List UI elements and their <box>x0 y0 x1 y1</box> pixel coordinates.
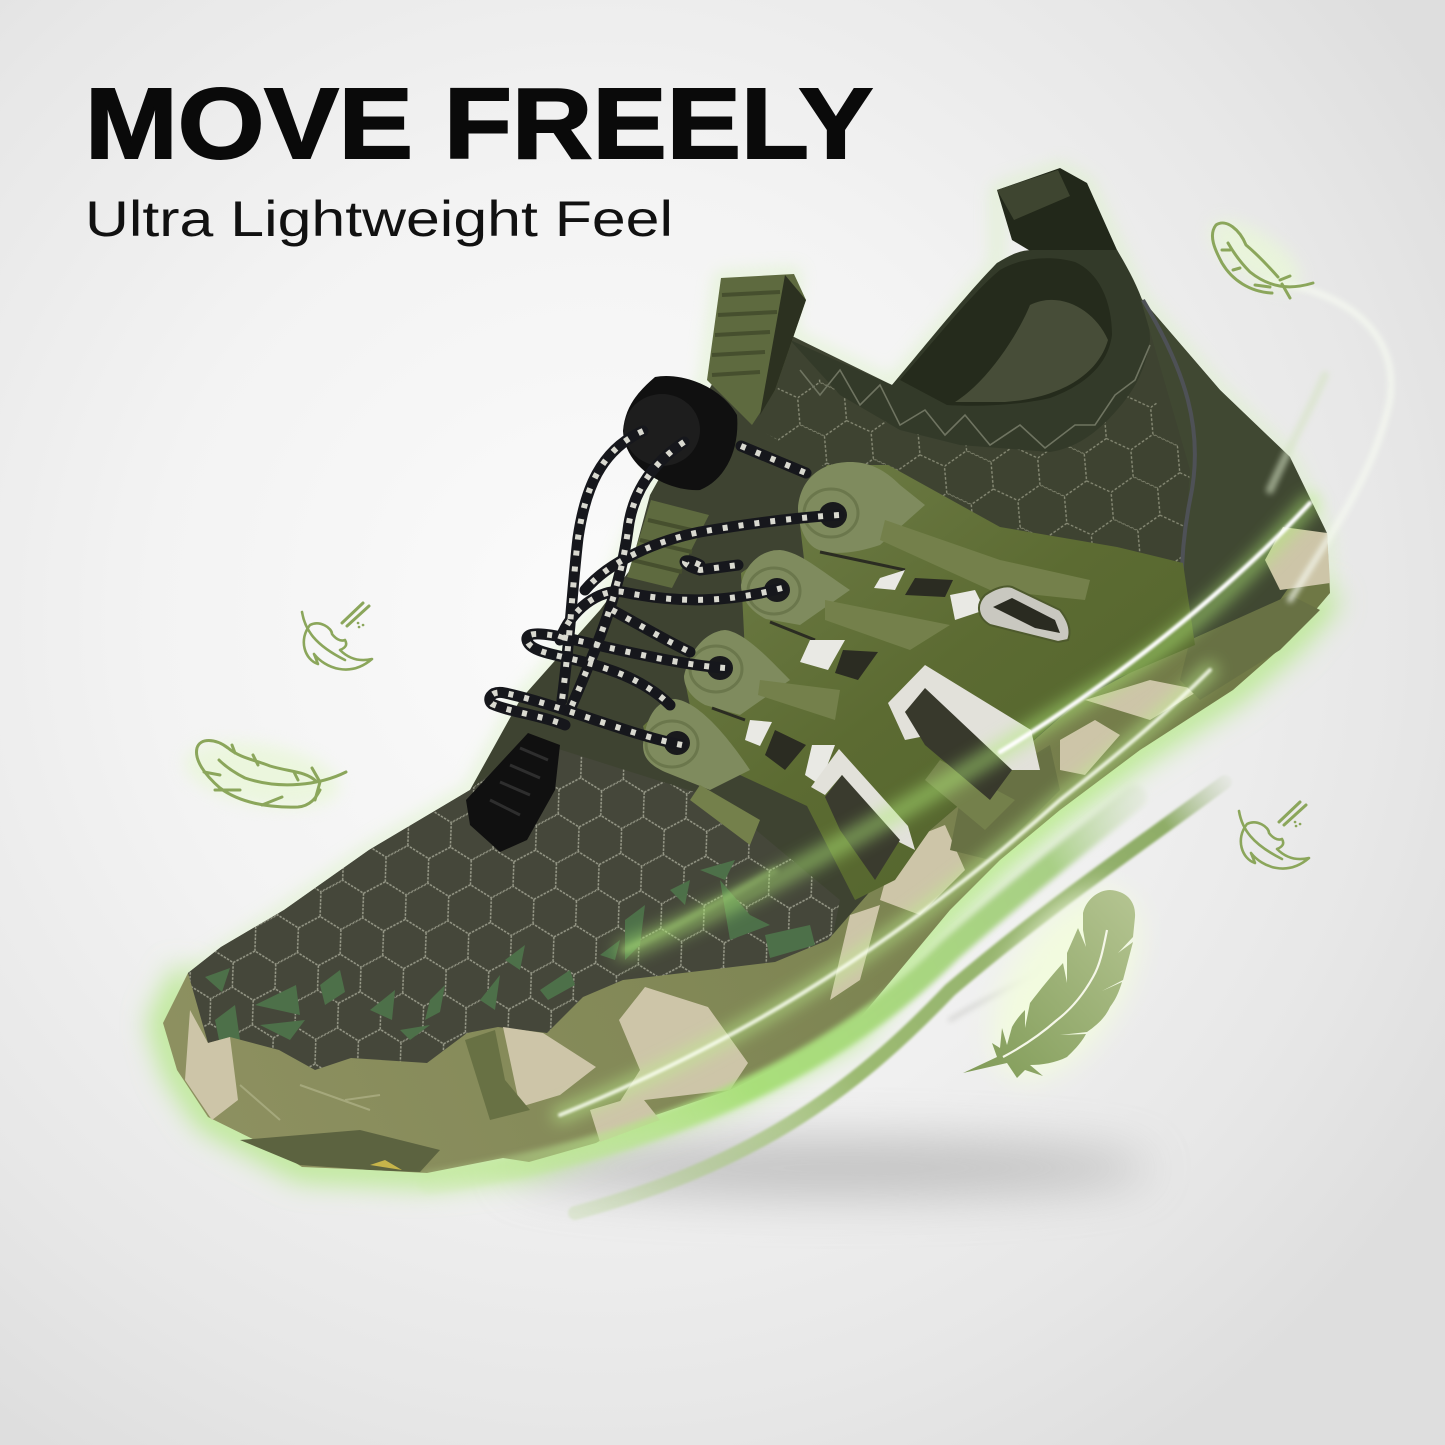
shoe <box>163 168 1330 1173</box>
tongue loop <box>627 274 806 588</box>
green band bright <box>430 797 1135 1182</box>
eyelet heads <box>643 462 925 790</box>
upper mesh <box>188 250 1300 1080</box>
oval window <box>979 586 1070 642</box>
strap gaps <box>712 552 905 720</box>
bright streak glow <box>560 670 1210 1115</box>
upper streak glow <box>625 503 1310 950</box>
upper streak core <box>1000 503 1310 752</box>
toe shards <box>205 860 815 1045</box>
large window <box>888 665 1040 800</box>
collar <box>790 250 1150 452</box>
ground shadow <box>510 1140 1150 1196</box>
elastic laces <box>490 431 839 745</box>
bright streak core <box>560 670 1210 1115</box>
side cage <box>643 462 1195 900</box>
icon: feather outline, top right <box>1199 208 1313 302</box>
faint toe streak <box>625 870 775 950</box>
motion swooshes <box>430 280 1391 1213</box>
sole <box>163 527 1330 1173</box>
icon: feather outline, left <box>180 732 346 818</box>
shoe glow <box>163 168 1330 1173</box>
pale green wisp <box>1270 375 1325 490</box>
moulded ridges <box>690 520 1090 845</box>
lower window <box>811 749 915 880</box>
dark eyelet holes <box>664 502 847 755</box>
heel counter <box>1140 297 1327 655</box>
grey wisp <box>950 955 1070 1020</box>
lace pull <box>466 733 560 852</box>
title: MOVE FREELY <box>85 68 873 180</box>
icon: solid feather <box>963 867 1167 1103</box>
green band dark <box>575 782 1225 1213</box>
rear pull tab <box>997 168 1135 300</box>
pale arc <box>1267 280 1391 600</box>
lace toggle <box>623 376 737 490</box>
icon: small feather with trails, right <box>1239 802 1309 868</box>
icon: small feather with trails, left <box>302 603 372 669</box>
tan camouflage patches <box>185 527 1330 1142</box>
subtitle: Ultra Lightweight Feel <box>85 191 673 247</box>
darker sole lugs <box>465 595 1320 1120</box>
white bars and mesh windows <box>745 570 985 785</box>
